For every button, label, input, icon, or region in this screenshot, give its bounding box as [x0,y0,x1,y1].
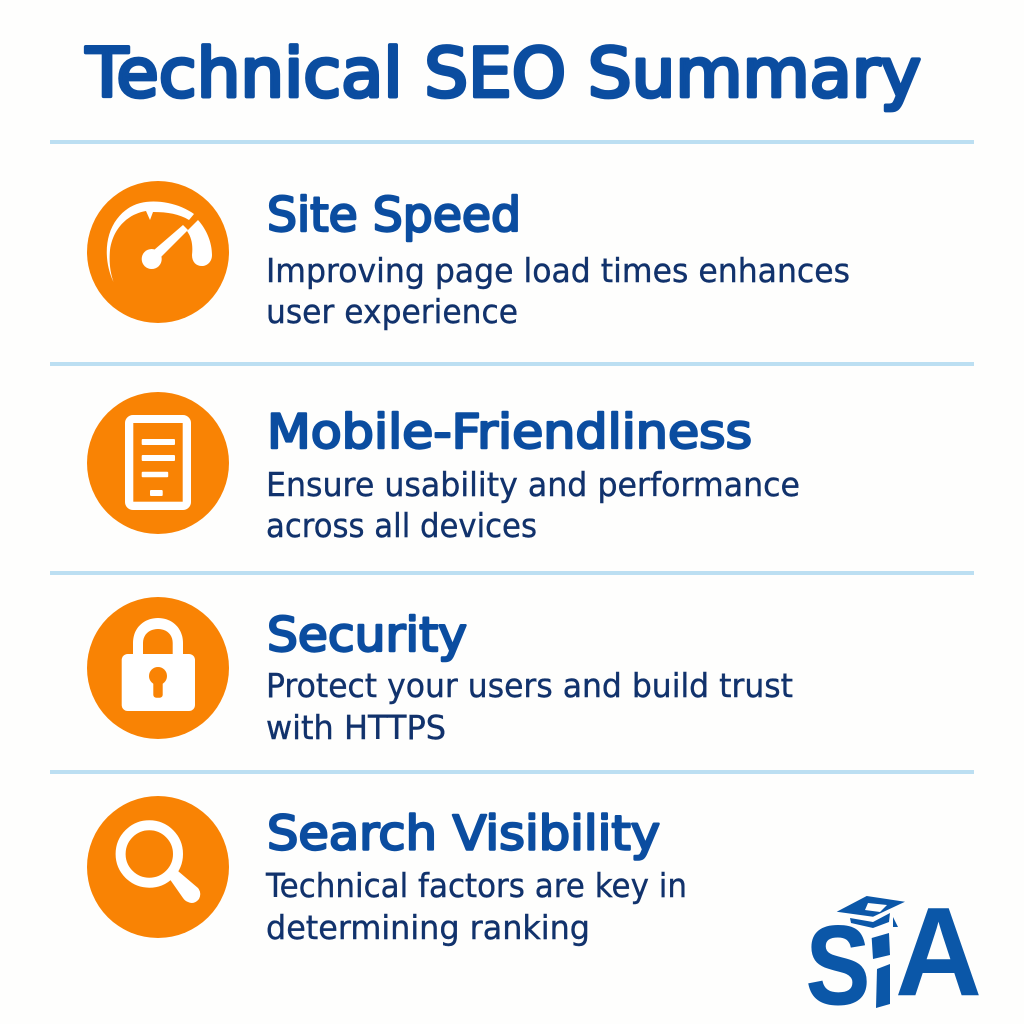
text: site speed description [266,251,850,331]
panel: security [87,597,793,747]
text: search visibility description: determining ranking [266,908,590,947]
panel: site speed [87,181,850,331]
icon: graduation cap [837,896,905,928]
text: search visibility description [265,866,687,947]
icon: speedometer [87,181,229,323]
text: security description [266,666,793,747]
text: search visibility description: Technical factors are key in [265,866,687,905]
text: mobile-friendliness description: Ensure usability and performance [266,465,800,504]
panel: mobile-friendliness [87,392,800,545]
icon: padlock [87,597,229,739]
text: security description: with HTTPS [266,708,446,747]
heading: search visibility: Search Visibility [267,806,660,862]
logo letter I [872,933,890,1008]
logo: SIA [806,881,982,1024]
text: security description: Protect your users and build trust [266,666,793,705]
logo letter A: A [895,881,982,1022]
heading: mobile-friendliness: Mobile-Friendliness [267,405,752,460]
text: site speed description: user experience [266,292,518,331]
text: site speed description: Improving page load times enhances [266,251,850,290]
text: mobile-friendliness description: across all devices [266,506,537,545]
icon: mobile phone [87,392,229,534]
heading: site speed: Site Speed [267,188,521,243]
panel: search visibility [87,796,687,947]
text: mobile-friendliness description [266,465,800,545]
heading: security: Security [267,608,467,663]
icon: magnifying glass [87,796,229,938]
title: Technical SEO Summary [85,34,921,114]
